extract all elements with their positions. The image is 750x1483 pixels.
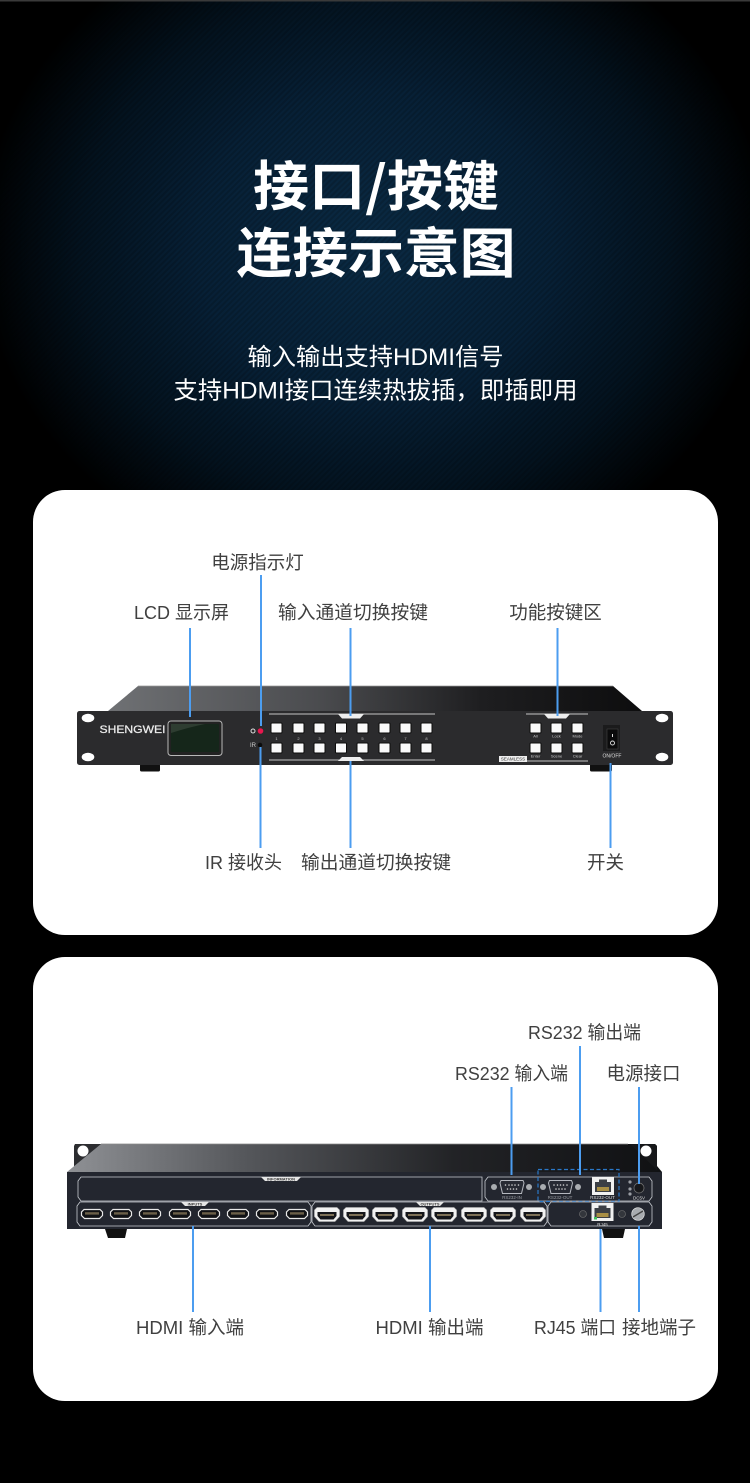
function buttons: All <box>533 734 538 738</box>
information area <box>78 1177 482 1201</box>
title <box>236 142 516 288</box>
LCD screen <box>168 721 222 756</box>
label: HDMI output: HDMI 输出端 <box>376 1317 484 1338</box>
label: RS232 input: RS232 输入端 <box>455 1063 568 1084</box>
RJ45 and ground group <box>548 1202 652 1227</box>
function buttons: Scene <box>551 754 563 758</box>
function buttons: Enter <box>531 754 541 758</box>
function buttons: Clear <box>573 754 583 758</box>
label: input channel buttons: 输入通道切换按键 <box>278 602 428 623</box>
RS232 and power group: RS232-OUT <box>548 1195 573 1200</box>
brand: SHENGWEI <box>100 724 166 736</box>
label: power port <box>606 1063 681 1184</box>
input output buttons: 8 <box>425 736 428 741</box>
rear device <box>67 1144 662 1238</box>
subtitle <box>174 344 578 404</box>
input output buttons <box>269 714 435 761</box>
label: RS232 input <box>455 1063 568 1175</box>
label: function buttons: 功能按键区 <box>509 602 602 623</box>
IR receiver: IR <box>250 743 257 749</box>
input output buttons: 1 <box>275 736 278 741</box>
function buttons <box>526 714 588 761</box>
label: ground terminal <box>622 1226 696 1338</box>
label: HDMI input: HDMI 输入端 <box>136 1317 244 1338</box>
label: output channel buttons: 输出通道切换按键 <box>301 852 451 873</box>
label: IR receiver <box>205 747 282 873</box>
function buttons: Mode <box>572 734 583 738</box>
RS232 and power group: DC5V <box>633 1196 645 1200</box>
HDMI input ports <box>77 1202 311 1226</box>
label: power port: 电源接口 <box>606 1063 681 1084</box>
RS232 and power group: RS232-IN <box>502 1195 522 1200</box>
input output buttons: 3 <box>318 736 321 741</box>
input output buttons: 7 <box>404 736 407 741</box>
HDMI input ports: INPUTS <box>188 1202 203 1207</box>
title: 接口/按键 <box>253 142 499 222</box>
power indicator <box>251 728 263 734</box>
panel: front panel card <box>33 490 718 935</box>
panel: rear panel card <box>33 957 718 1401</box>
label: switch <box>587 763 624 873</box>
subtitle: 支持HDMI接口连续热拔插，即插即用 <box>174 378 578 404</box>
RS232 and power group: RS232-OUT <box>590 1195 615 1200</box>
label: LCD: LCD 显示屏 <box>134 602 229 623</box>
power switch <box>603 725 621 760</box>
label: LCD <box>134 602 229 717</box>
HDMI output ports <box>312 1202 547 1226</box>
power switch: ON/OFF <box>603 754 621 760</box>
label: function buttons <box>509 602 602 716</box>
label: ground terminal: 接地端子 <box>622 1317 696 1338</box>
HDMI output ports: OUTPUTS <box>420 1202 440 1207</box>
title: 连接示意图 <box>236 210 516 288</box>
label: RJ45 <box>534 1229 616 1338</box>
label: RJ45: RJ45 端口 <box>534 1317 616 1338</box>
input output buttons: 2 <box>297 736 300 741</box>
RJ45 and ground group: RJ45 <box>597 1222 608 1227</box>
front device <box>77 686 673 772</box>
input output buttons: 6 <box>383 736 386 741</box>
label: RS232 output: RS232 输出端 <box>528 1022 641 1043</box>
information area: INFORMATION <box>267 1177 295 1182</box>
label: HDMI input <box>136 1226 244 1338</box>
label: HDMI output <box>376 1226 484 1338</box>
subtitle: 输入输出支持HDMI信号 <box>248 344 504 371</box>
input output buttons: 4 <box>340 736 343 741</box>
dashed RS232 output highlight <box>538 1170 619 1202</box>
RS232 and power group <box>485 1177 652 1201</box>
IR receiver <box>250 743 262 749</box>
function buttons: Lock <box>552 734 561 738</box>
label: IR receiver: IR 接收头 <box>205 852 282 873</box>
label: power indicator: 电源指示灯 <box>211 552 304 573</box>
seamless badge: SEAMLESS <box>501 757 525 762</box>
label: switch: 开关 <box>587 852 624 873</box>
input output buttons: 5 <box>361 736 364 741</box>
